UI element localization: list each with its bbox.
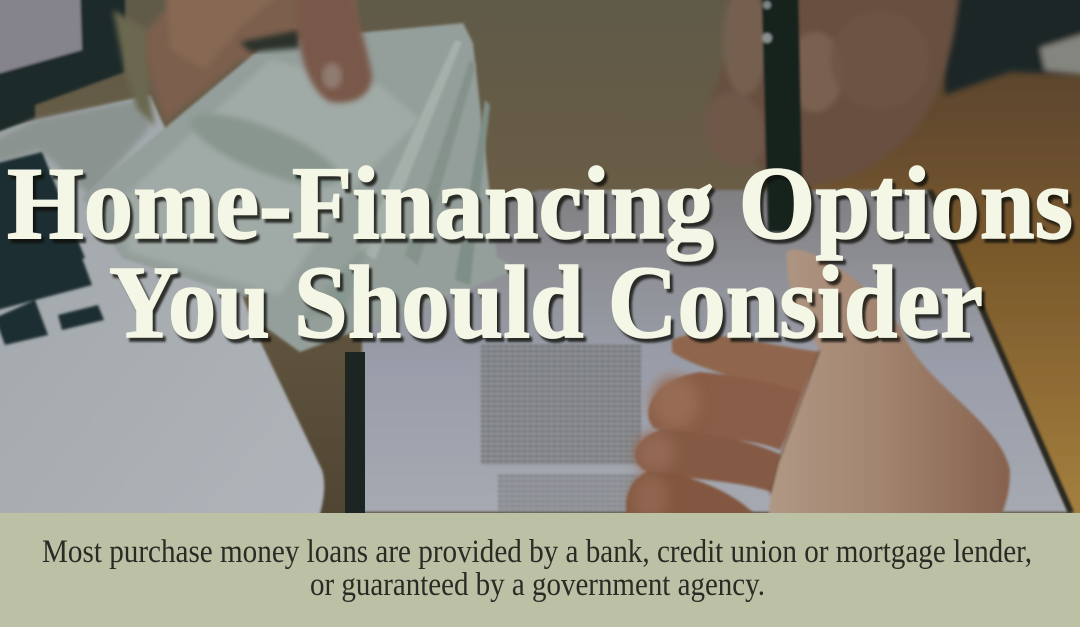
title line 2: You Should Consider	[109, 245, 983, 360]
black pen	[762, 0, 803, 232]
caption band	[0, 513, 1080, 627]
title	[7, 146, 1076, 360]
caption text line 2: or guaranteed by a government agency.	[310, 567, 765, 603]
orange desk surface at right	[800, 70, 1080, 520]
monitor	[0, 0, 125, 135]
hand holding pen	[695, 0, 960, 186]
hand in foreground with thumb up	[626, 250, 1010, 522]
dark binder edge	[345, 352, 365, 515]
printed text on paper	[481, 345, 641, 512]
beige strip behind hand	[113, 10, 155, 127]
document paper	[362, 190, 1074, 512]
fan of dollar bills	[82, 0, 518, 352]
laptop base	[0, 95, 324, 520]
upper laptop deck	[0, 98, 148, 195]
dark clothing top right	[940, 0, 1080, 95]
hand holding money	[146, 0, 360, 122]
keyboard	[0, 152, 104, 345]
